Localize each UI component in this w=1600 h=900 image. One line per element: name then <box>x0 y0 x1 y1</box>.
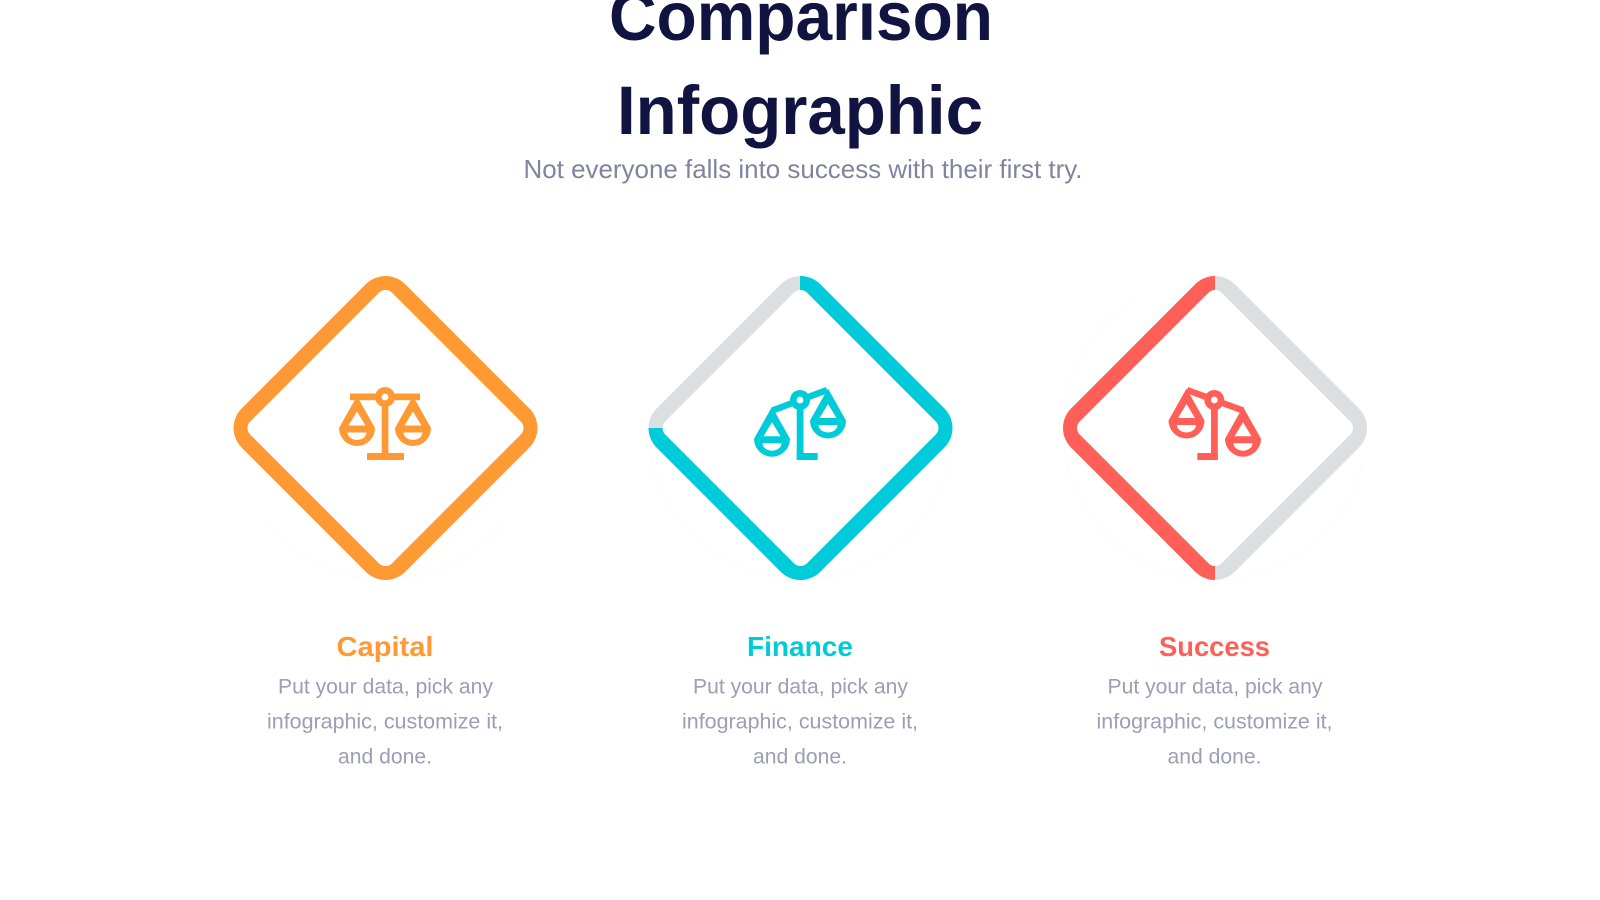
text: capital description <box>267 676 503 768</box>
subtitle: Not everyone falls into success with their first try. <box>524 154 1082 184</box>
panel: finance <box>648 276 952 764</box>
text: finance description <box>682 676 918 768</box>
text: finance description: and done. <box>753 746 847 768</box>
heading: finance: Finance <box>747 631 853 662</box>
heading: success: Success <box>1159 631 1270 662</box>
icon: balanced scales <box>339 387 431 460</box>
heading: capital: Capital <box>336 631 434 662</box>
text: success description <box>1096 676 1332 768</box>
panel: capital <box>234 276 538 764</box>
icon: scales tilted right <box>754 388 846 460</box>
diamond: success <box>1063 276 1367 580</box>
title: Infographic <box>617 72 983 149</box>
icon: scales tilted left <box>1168 388 1261 460</box>
text: finance description: Put your data, pick any <box>693 676 908 698</box>
text: capital description: infographic, customize it, <box>267 710 503 734</box>
text: success description: infographic, customize it, <box>1096 710 1332 734</box>
text: finance description: infographic, customize it, <box>682 710 918 734</box>
text: capital description: Put your data, pick any <box>278 676 493 698</box>
title <box>609 0 993 149</box>
text: success description: and done. <box>1168 746 1262 768</box>
diamond: capital <box>234 276 538 580</box>
text: capital description: and done. <box>338 746 432 768</box>
panel: success <box>1063 276 1367 764</box>
text: success description: Put your data, pick any <box>1108 676 1323 698</box>
diamond: finance <box>648 276 952 580</box>
